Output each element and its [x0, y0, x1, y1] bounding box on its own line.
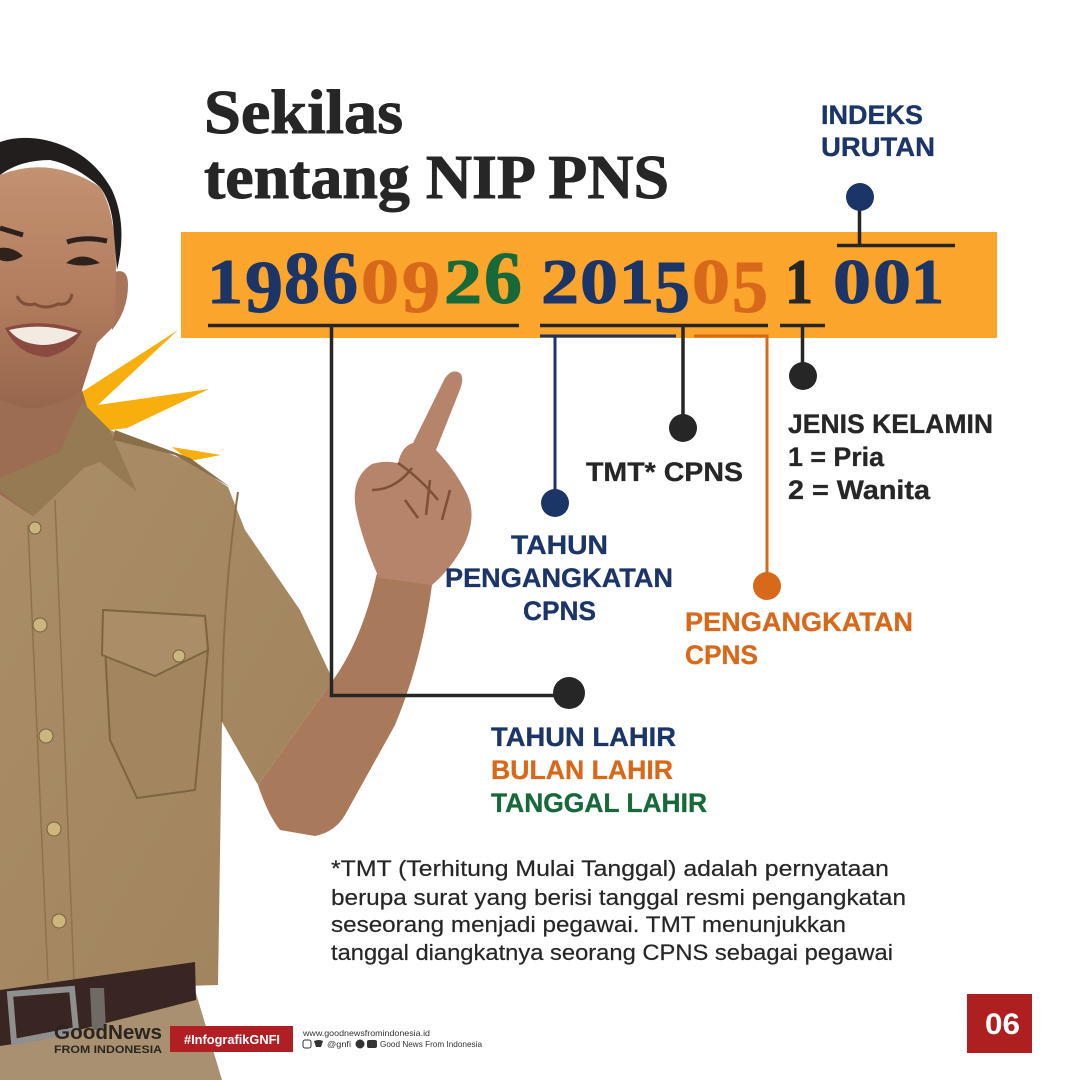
label: tahun pengangkatan: PENGANGKATAN [445, 563, 673, 593]
nose [17, 294, 72, 307]
label: jenis kelamin: 1 = Pria [788, 442, 885, 472]
NIP digits: 5 [732, 247, 768, 329]
connector: TMT CPNS [540, 326, 768, 428]
eyes and brows [0, 228, 107, 242]
label: jenis kelamin: JENIS KELAMIN [788, 409, 993, 439]
head [0, 167, 116, 408]
label: birth date: TANGGAL LAHIR [491, 788, 707, 818]
buttons [29, 522, 185, 928]
footnote text: seseorang menjadi pegawai. TMT menunjukkan [331, 912, 846, 937]
footer contact info: Good News From Indonesia [380, 1039, 482, 1049]
NIP digits: 0 [873, 246, 911, 317]
title [204, 79, 669, 212]
shoulder strap [113, 430, 230, 487]
connector: appointment year [540, 336, 676, 503]
label: indeks urutan: URUTAN [821, 132, 935, 162]
NIP digits: 1 [911, 246, 944, 317]
NIP digits: 0 [833, 246, 871, 317]
footer contact info: @gnfi [327, 1039, 351, 1049]
title: Sekilas [204, 79, 403, 147]
smile [5, 323, 82, 357]
label: birth date [491, 722, 707, 818]
NIP digits: 8 [284, 238, 320, 320]
connector: birth date [208, 326, 569, 696]
footer logo [54, 1022, 162, 1056]
NIP digits: 0 [580, 246, 618, 317]
panel: orange NIP number bar [181, 232, 997, 338]
NIP digits: 0 [361, 246, 399, 317]
man in uniform [0, 138, 472, 1080]
footnote text: *TMT (Terhitung Mulai Tanggal) adalah pernyataan [331, 856, 889, 881]
NIP digits: 1 [207, 246, 243, 317]
NIP digits: 6 [484, 238, 522, 320]
NIP digits [207, 238, 944, 329]
NIP digits: 6 [322, 238, 358, 320]
collar [0, 402, 137, 517]
NIP digits: 5 [654, 247, 690, 329]
connector: sequence index [837, 197, 955, 246]
label: tahun pengangkatan: TAHUN [511, 530, 608, 560]
sleeve seam [222, 492, 238, 722]
connector: gender [780, 326, 825, 376]
pants [0, 990, 222, 1080]
shirt body [0, 402, 333, 992]
NIP digits: 2 [444, 246, 482, 317]
icon: orange burst behind shoulder [82, 330, 221, 461]
label: indeks urutan [821, 100, 935, 162]
NIP digits: 1 [785, 246, 813, 317]
label: TMT CPNS: TMT* CPNS [586, 457, 743, 487]
placket [28, 500, 74, 980]
footer logo: GoodNews [54, 1022, 162, 1044]
connector: appointment month [694, 336, 767, 586]
footer hashtag badge: #InfografikGNFI [184, 1032, 280, 1047]
label: pengangkatan: CPNS [685, 640, 758, 670]
NIP digits: 9 [245, 247, 283, 329]
footnote text: berupa surat yang berisi tanggal resmi pengangkatan [331, 885, 906, 910]
hand [355, 371, 472, 585]
NIP digits: 2 [541, 246, 579, 317]
label: birth date: BULAN LAHIR [491, 755, 673, 785]
label: pengangkatan: PENGANGKATAN [685, 607, 913, 637]
NIP digits: 9 [402, 247, 440, 329]
label: jenis kelamin: 2 = Wanita [788, 475, 931, 505]
label: jenis kelamin [788, 409, 993, 505]
footer hashtag badge [170, 1026, 293, 1052]
ear [112, 271, 128, 330]
footer logo: FROM INDONESIA [54, 1044, 162, 1056]
arm [258, 573, 432, 836]
label: birth date: TAHUN LAHIR [491, 722, 676, 752]
pocket [103, 610, 208, 798]
belt [0, 962, 196, 1046]
label: tahun pengangkatan [445, 530, 673, 626]
page number badge [967, 994, 1032, 1053]
neck [0, 385, 100, 517]
title: tentang NIP PNS [204, 144, 669, 212]
connector lines [208, 197, 955, 696]
footer contact info [302, 1028, 482, 1049]
NIP digits: 1 [619, 246, 654, 317]
NIP digits: 0 [692, 246, 730, 317]
footer contact info: www.goodnewsfromindonesia.id [302, 1028, 430, 1038]
footnote text: tanggal diangkatnya seorang CPNS sebagai pegawai [331, 940, 893, 965]
label: pengangkatan [685, 607, 913, 670]
label: tahun pengangkatan: CPNS [523, 596, 596, 626]
hair [0, 138, 121, 270]
page number badge: 06 [985, 1008, 1020, 1041]
label: indeks urutan: INDEKS [821, 100, 923, 130]
connector dots [541, 183, 874, 709]
footnote text [331, 856, 906, 965]
